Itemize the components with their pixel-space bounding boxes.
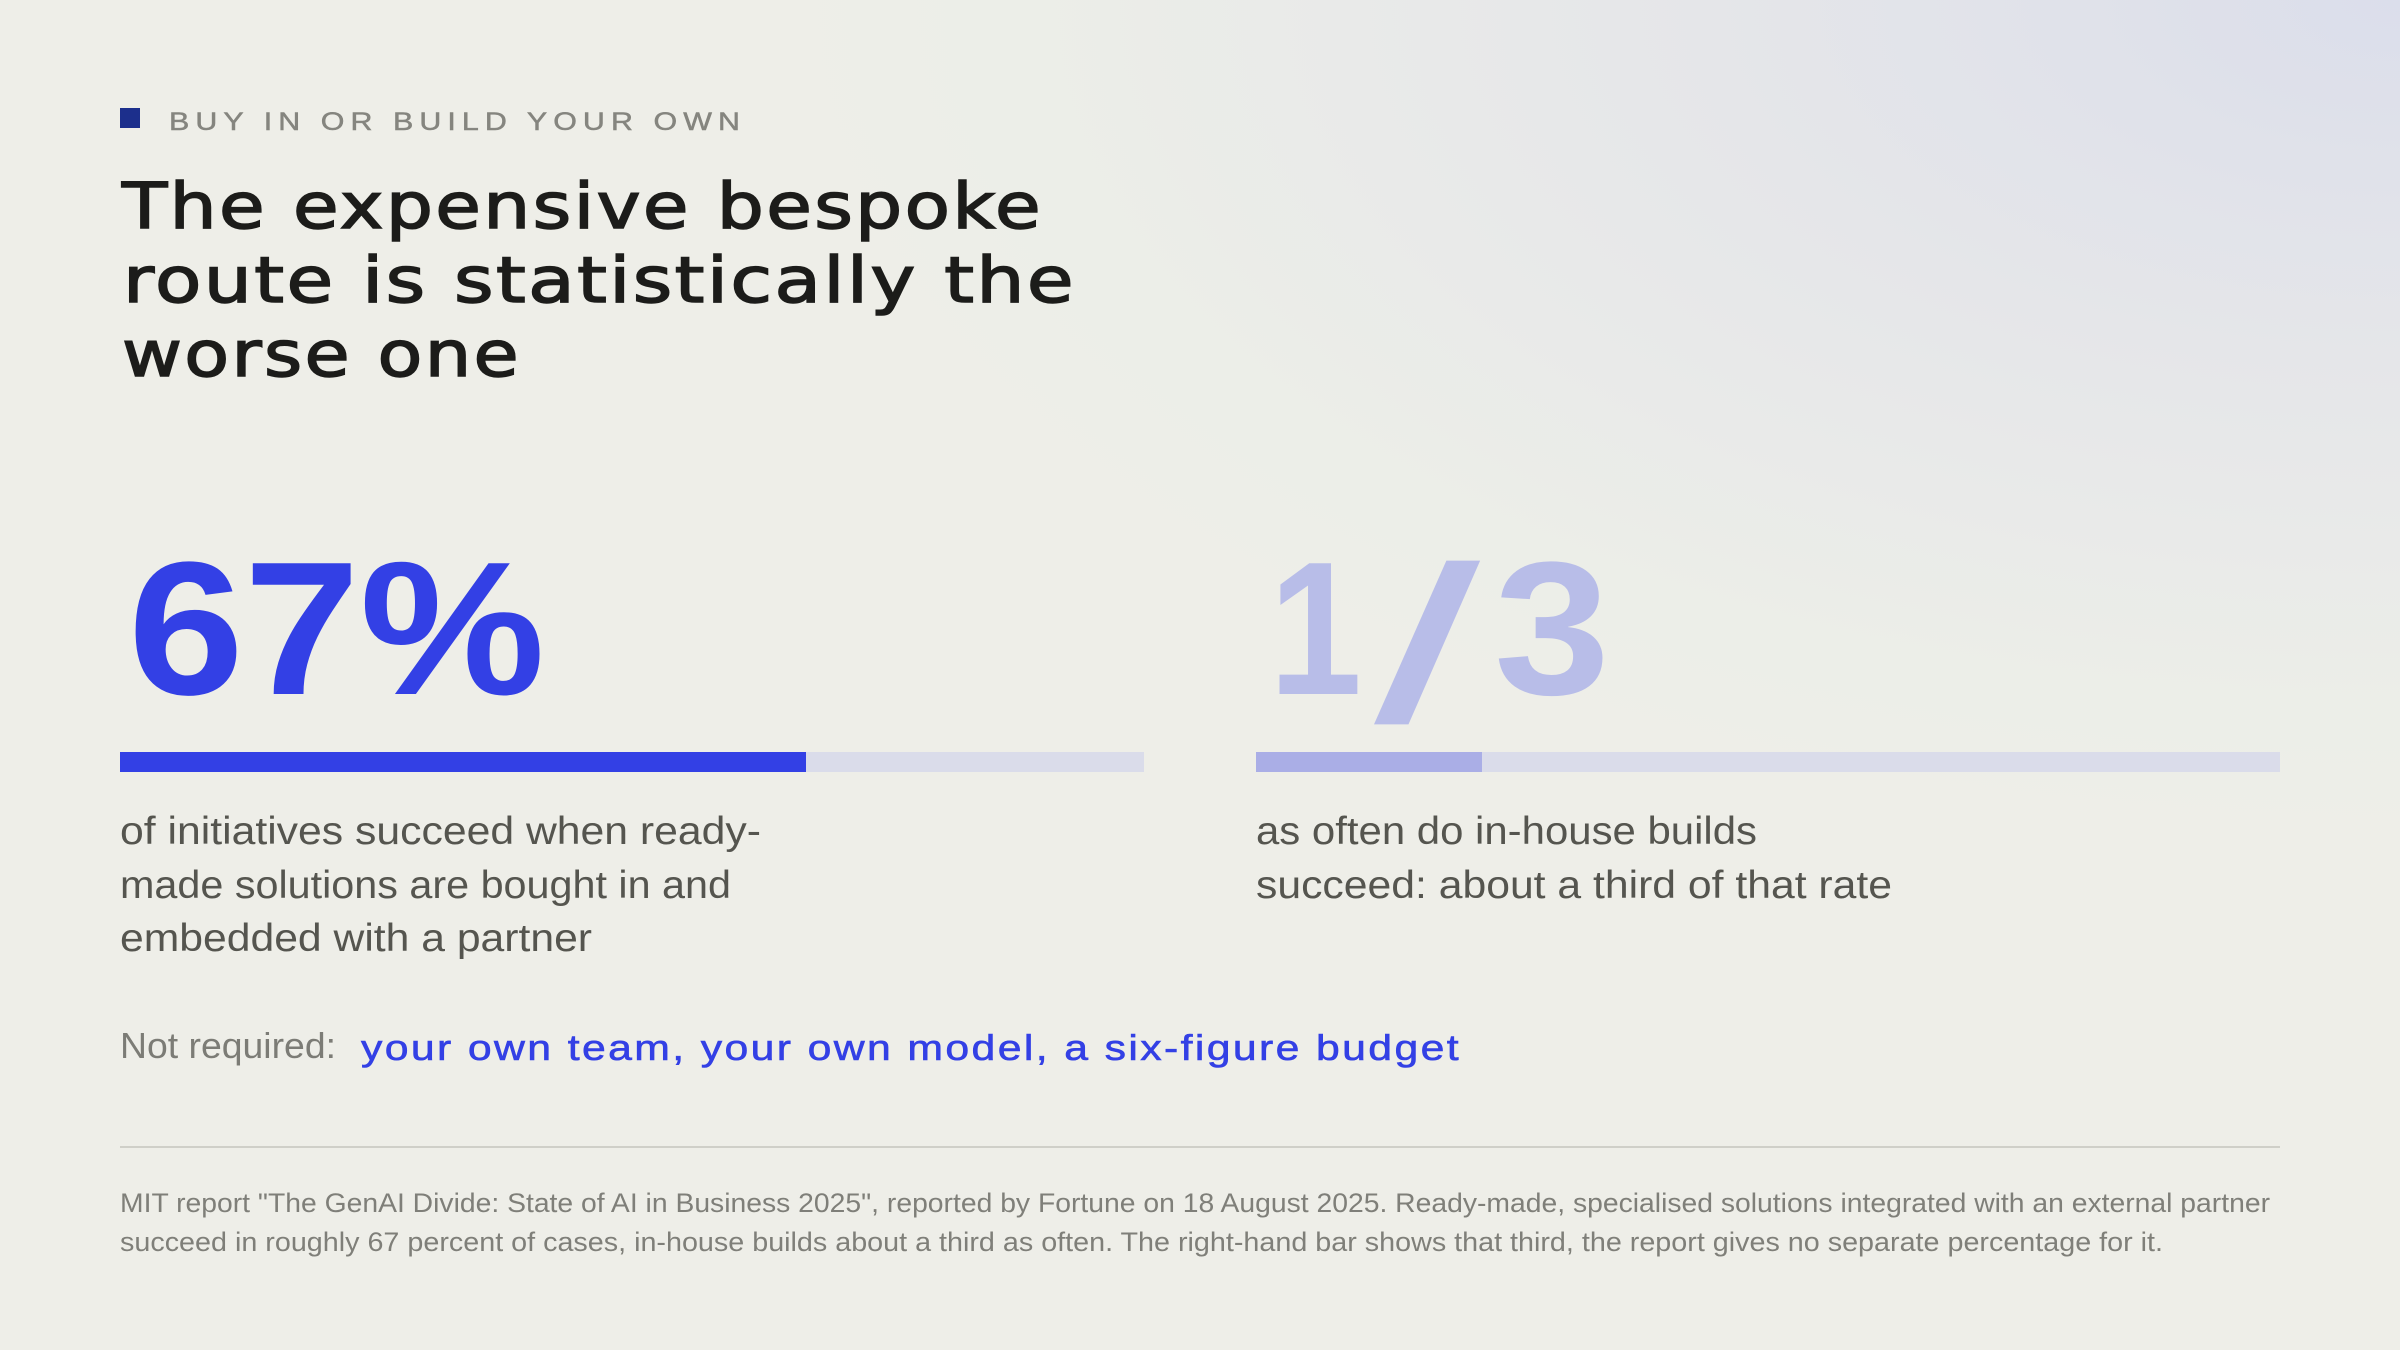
- big number 1/3: [1269, 521, 1610, 767]
- big number 1/3: /: [1363, 521, 1492, 767]
- icon: eyebrow square: [120, 108, 140, 128]
- big number 1/3: 1: [1269, 523, 1362, 735]
- title: worse one: [122, 318, 521, 391]
- callout label: Not required:: [120, 1025, 336, 1066]
- big number 1/3: 3: [1494, 523, 1610, 735]
- eyebrow label: BUY IN OR BUILD YOUR OWN: [169, 108, 746, 136]
- stat description: [120, 810, 761, 960]
- big number 67%: 67%: [128, 523, 545, 735]
- source note: [120, 1188, 2270, 1257]
- callout value: your own team, your own model, a six-figure budget: [361, 1027, 1461, 1068]
- bar chart: one third progress bar: [1256, 752, 2280, 772]
- panel: ready-made solutions stat: [120, 523, 1144, 960]
- header block: [120, 108, 1076, 391]
- bar chart: 67 percent progress bar: [120, 752, 1144, 772]
- stat description: made solutions are bought in and: [120, 864, 731, 907]
- source note: MIT report "The GenAI Divide: State of AI in Business 2025", reported by Fortune on 18 August 2025. Ready-made, specialised solutions integrated with an external partner: [120, 1188, 2270, 1218]
- title: The expensive bespoke: [121, 170, 1043, 243]
- stat description: embedded with a partner: [120, 917, 592, 960]
- callout: not required: [120, 1025, 1461, 1068]
- stat description: of initiatives succeed when ready-: [120, 810, 761, 853]
- stat description: as often do in-house builds: [1256, 810, 1757, 853]
- stat description: [1256, 810, 1892, 907]
- stat description: succeed: about a third of that rate: [1256, 864, 1892, 907]
- title: route is statistically the: [123, 244, 1076, 317]
- source note: succeed in roughly 67 percent of cases, in-house builds about a third as often. The right-hand bar shows that third, the report gives no separate percentage for it.: [120, 1227, 2163, 1257]
- title: [121, 170, 1076, 391]
- panel: in-house builds stat: [1256, 521, 2280, 907]
